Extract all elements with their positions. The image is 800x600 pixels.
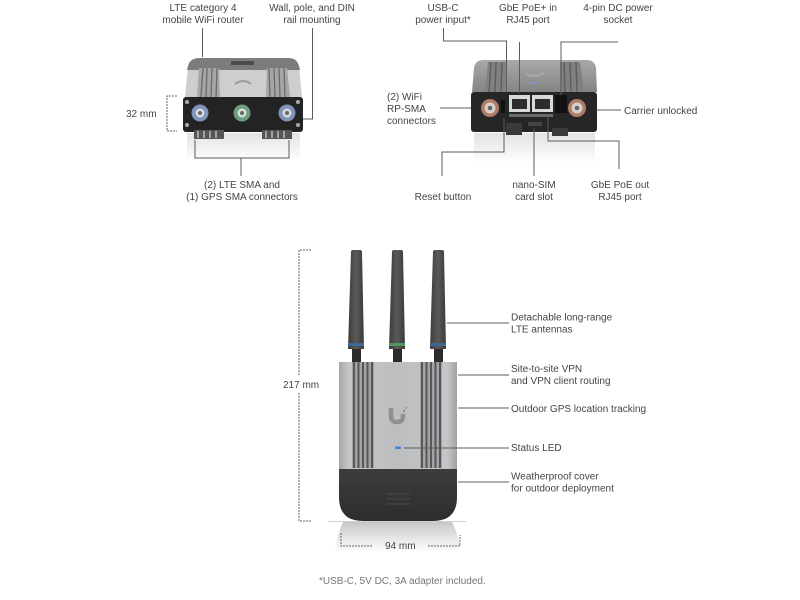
aluminium body [339,362,457,470]
device: main view with antennas [328,250,466,552]
label: nano-SIM: card slot [515,192,553,203]
label: mounting: rail mounting [283,15,341,26]
label: GbE PoE out: RJ45 port [598,192,642,203]
label: GbE PoE out [591,180,649,203]
label: USB-C: USB-C [427,3,459,14]
label: WiFi connectors: (2) WiFi [387,92,422,103]
label: mounting: Wall, pole, and DIN [269,3,355,14]
label: weatherproof cover [511,472,614,494]
label: DC socket: 4-pin DC power [583,3,653,14]
label: 32 mm: 32 mm [126,109,157,120]
footnote: *USB-C, 5V DC, 3A adapter included. [319,576,486,587]
label: VPN [511,364,611,387]
label: USB-C [415,3,471,26]
leader lines [195,28,621,482]
label: DC socket: socket [604,15,633,26]
label: nano-SIM: nano-SIM [512,180,556,191]
label: LTE SMA connectors [186,180,298,203]
label: GbE PoE out: GbE PoE out [591,180,649,191]
label: LTE SMA connectors: (1) GPS SMA connectors [186,192,298,203]
label: VPN: Site-to-site VPN [511,364,582,375]
label: nano-SIM [512,180,556,203]
label: LTE category: LTE category 4 [169,3,237,14]
label: weatherproof cover: for outdoor deployment [511,484,614,494]
label: 217 mm: 217 mm [283,380,319,391]
label: USB-C: power input* [415,15,471,26]
device: front view with LTE connectors [183,58,303,161]
label: LTE SMA connectors: (2) LTE SMA and [204,180,280,191]
label: GPS: Outdoor GPS location tracking [511,404,646,415]
label: 94 mm: 94 mm [385,541,416,552]
status LED [395,446,401,449]
label: WiFi connectors: RP-SMA [387,104,426,115]
label: VPN: and VPN client routing [511,376,611,387]
label: LTE category: mobile WiFi router [162,15,244,26]
label: DC socket [583,3,653,26]
label: GbE PoE+ in: RJ45 port [506,15,550,26]
label: antennas [511,312,613,336]
device: rear view with ports [471,60,597,163]
weatherproof cover [339,469,457,521]
dimension brackets [167,96,460,546]
antennas [348,250,446,362]
label: LTE category [162,3,244,26]
label: WiFi connectors [387,92,436,127]
label: antennas: Detachable long-range [511,312,613,324]
Ubiquiti logo [391,408,403,422]
label: GbE PoE+ in [499,3,557,26]
label: WiFi connectors: connectors [387,116,436,127]
label: mounting [269,3,355,26]
label: weatherproof cover: Weatherproof cover [511,472,599,482]
label: GbE PoE+ in: GbE PoE+ in [499,3,557,14]
label: carrier unlocked: Carrier unlocked [624,106,697,117]
label: reset button: Reset button [415,192,471,203]
label: status LED: Status LED [511,443,562,454]
label: antennas: LTE antennas [511,324,573,336]
